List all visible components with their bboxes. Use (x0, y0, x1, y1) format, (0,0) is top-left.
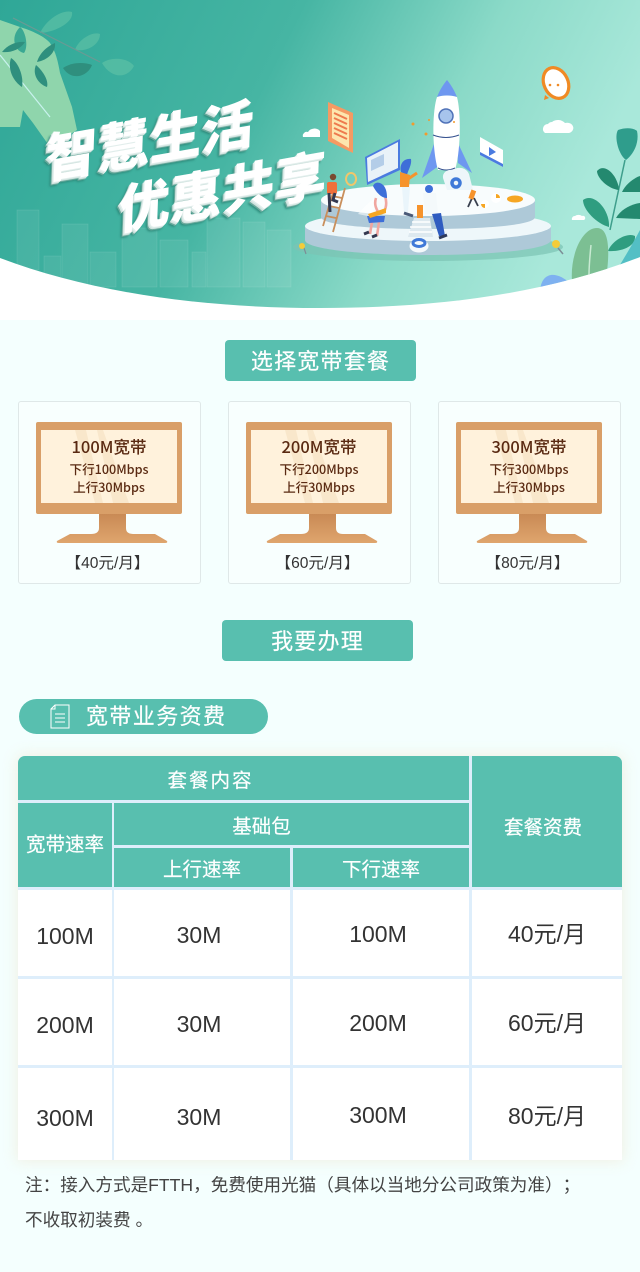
seated person (417, 185, 447, 238)
price: 【80元/月】 (485, 555, 570, 572)
monitor: 下行300Mbps (489, 459, 569, 478)
row 100M: 100M (36, 922, 94, 948)
row 200M: 30M (177, 1010, 221, 1036)
clouds right (543, 120, 573, 133)
title line 1: 智慧生活 (45, 80, 256, 194)
icon: document (50, 704, 70, 728)
video card (480, 137, 503, 167)
price: 【60元/月】 (275, 555, 360, 572)
header: package content (18, 756, 469, 800)
row 100M: 40元/月 (508, 921, 586, 947)
monitor (456, 422, 602, 543)
price: 【40元/月】 (65, 555, 150, 572)
hero banner (0, 0, 640, 320)
button: apply: 我要办理 (271, 629, 364, 654)
header: upstream (114, 848, 290, 887)
person with laptop (358, 183, 387, 237)
heading text: 宽带业务资费 (86, 704, 226, 729)
monitor: 300M宽带 (492, 434, 566, 458)
row 300M: 300M (349, 1102, 407, 1128)
header: downstream (293, 848, 469, 887)
header: speed (18, 803, 112, 887)
monitor: 下行200Mbps (279, 459, 359, 478)
left leaves (0, 12, 134, 147)
cloud left (303, 129, 320, 137)
row 100M (18, 890, 622, 976)
stairs (408, 218, 433, 237)
row 300M: 30M (177, 1104, 221, 1130)
row 100M: 100M (349, 920, 407, 946)
title line 2: 优惠共享 (118, 131, 329, 245)
orange document (328, 102, 353, 153)
row 300M: 300M (36, 1104, 94, 1130)
row 200M: 200M (349, 1010, 407, 1036)
footnote (25, 1175, 580, 1230)
header: package fee: 套餐资费 (504, 817, 582, 839)
header: base package: 基础包 (232, 816, 291, 838)
row 200M: 60元/月 (508, 1010, 586, 1036)
gear (410, 240, 428, 252)
heading: choose plan: 选择宽带套餐 (251, 349, 390, 374)
section heading pill (19, 699, 268, 734)
person on ladder (323, 173, 356, 232)
header: base package (114, 803, 469, 845)
heading: choose plan (225, 340, 416, 381)
row 100M: 30M (177, 922, 221, 948)
panel: 100M plan (18, 401, 201, 584)
platform lower (293, 241, 563, 261)
button: apply (222, 620, 413, 661)
platform upper (321, 200, 535, 229)
row 300M (18, 1068, 622, 1160)
monitor: 上行30Mbps (283, 477, 355, 496)
skyline (17, 210, 291, 287)
row 300M: 80元/月 (508, 1103, 586, 1129)
speech bubble (542, 66, 570, 100)
row 200M: 200M (36, 1012, 94, 1038)
spotlights (299, 240, 563, 254)
footnote: 注：接入方式是FTTH，免费使用光猫（具体以当地分公司政策为准）； (25, 1175, 580, 1195)
rocket (412, 80, 473, 190)
header: package fee (472, 756, 622, 887)
right plants (540, 128, 640, 290)
row 200M (18, 979, 622, 1065)
header: package content: 套餐内容 (167, 770, 254, 792)
monitor: 100M宽带 (72, 434, 146, 458)
header: upstream: 上行速率 (163, 859, 241, 881)
header: speed: 宽带速率 (26, 834, 104, 856)
tariff table (18, 756, 622, 1160)
footnote: 不收取初装费 。 (25, 1210, 153, 1230)
blue monitor (365, 139, 400, 185)
monitor: 下行100Mbps (69, 459, 149, 478)
small figure and pie items (468, 190, 523, 208)
monitor: 上行30Mbps (73, 477, 145, 496)
standing person (400, 159, 417, 216)
panel: 300M plan (438, 401, 621, 584)
header: downstream: 下行速率 (342, 859, 420, 881)
monitor (36, 422, 182, 543)
monitor (246, 422, 392, 543)
panel: 200M plan (228, 401, 411, 584)
monitor: 200M宽带 (282, 434, 356, 458)
monitor: 上行30Mbps (493, 477, 565, 496)
